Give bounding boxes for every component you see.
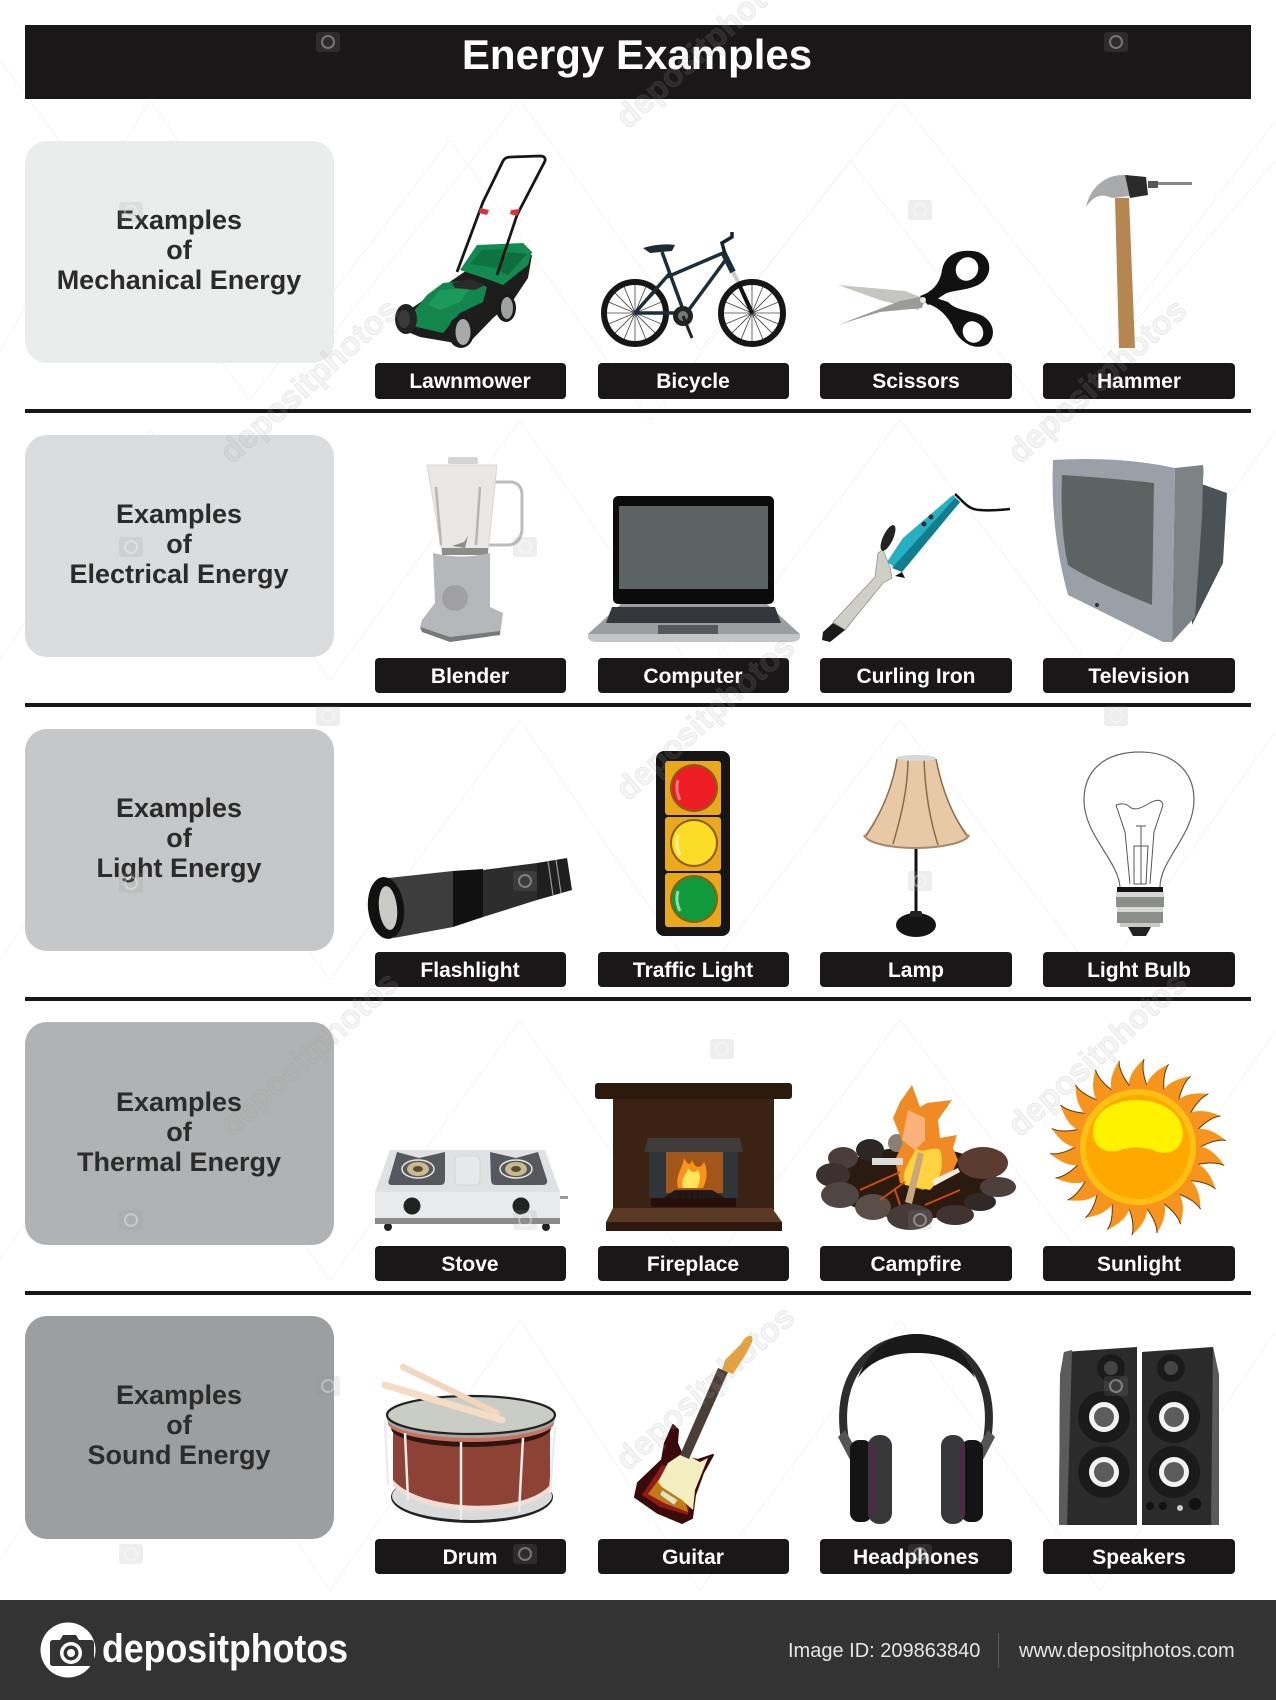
- panel: mechanical energy: [25, 141, 334, 363]
- panel: mechanical energy: Mechanical Energy: [57, 265, 301, 295]
- watermarks: depositphotos: [1000, 964, 1194, 1143]
- label: Fireplace: [598, 1246, 789, 1281]
- icon: sun: [1049, 1059, 1227, 1235]
- section: thermal energy: [25, 1022, 1235, 1281]
- label: Lawnmower: Lawnmower: [409, 370, 531, 393]
- icon: television: [1053, 459, 1227, 642]
- section: mechanical energy: [25, 141, 1235, 399]
- label: Traffic Light: [598, 952, 789, 987]
- watermarks: depositphotos: [212, 291, 406, 470]
- title bar: [25, 25, 1251, 99]
- label: Lamp: Lamp: [888, 959, 944, 982]
- label: Guitar: [598, 1539, 789, 1574]
- label: Computer: [598, 658, 789, 693]
- icon: blender: [420, 457, 522, 642]
- panel: mechanical energy: Examples: [116, 205, 242, 235]
- panel: light energy: Examples: [116, 793, 242, 823]
- footer bar: [0, 1600, 1276, 1700]
- icon: bicycle: [604, 232, 783, 344]
- section: light energy: [25, 729, 1235, 987]
- label: Headphones: [820, 1539, 1012, 1574]
- panel: light energy: [25, 729, 334, 951]
- icon: campfire: [816, 1085, 1016, 1230]
- label: Guitar: Guitar: [662, 1546, 724, 1569]
- section: sound energy: [25, 1316, 1235, 1574]
- label: Scissors: [820, 363, 1012, 399]
- icon: speakers: [1059, 1347, 1219, 1525]
- section: electrical energy: [25, 435, 1235, 693]
- label: Headphones: Headphones: [853, 1546, 979, 1569]
- label: Scissors: Scissors: [872, 370, 960, 393]
- icon: guitar: [635, 1336, 752, 1523]
- label: Campfire: Campfire: [870, 1253, 962, 1276]
- label: Blender: Blender: [431, 665, 509, 688]
- label: Light Bulb: [1043, 952, 1235, 987]
- label: Computer: Computer: [643, 665, 743, 688]
- label: Bicycle: Bicycle: [656, 370, 730, 393]
- image id: Image ID: 209863840: [788, 1640, 980, 1662]
- label: Stove: [375, 1246, 566, 1281]
- wordmark: depositphotos: [102, 1627, 348, 1671]
- label: Lamp: [820, 952, 1012, 987]
- panel: thermal energy: [25, 1022, 334, 1245]
- panel: light energy: Light Energy: [96, 853, 262, 883]
- icon: depositphotos logo: [40, 1622, 96, 1678]
- label: Light Bulb: Light Bulb: [1087, 959, 1191, 982]
- label: Sunlight: Sunlight: [1097, 1253, 1181, 1276]
- icon: curling iron: [822, 494, 1010, 642]
- label: Drum: [375, 1539, 566, 1574]
- panel: electrical energy: of: [166, 529, 193, 559]
- label: Fireplace: Fireplace: [647, 1253, 739, 1276]
- panel: electrical energy: [25, 435, 334, 657]
- icon: lawnmower: [395, 156, 545, 348]
- icon: traffic light: [656, 751, 730, 936]
- panel: sound energy: Sound Energy: [87, 1440, 271, 1470]
- watermarks: depositphotos: [608, 1298, 802, 1477]
- panel: sound energy: Examples: [116, 1380, 242, 1410]
- watermarks: depositphotos: [608, 628, 802, 807]
- panel: thermal energy: Thermal Energy: [77, 1147, 281, 1177]
- label: Blender: [375, 658, 566, 693]
- label: Drum: Drum: [443, 1546, 497, 1569]
- label: Hammer: [1043, 363, 1235, 399]
- label: Speakers: Speakers: [1092, 1546, 1186, 1569]
- panel: electrical energy: Electrical Energy: [69, 559, 289, 589]
- label: Campfire: [820, 1246, 1012, 1281]
- label: Television: Television: [1088, 665, 1190, 688]
- icon: computer: [588, 496, 800, 642]
- label: Flashlight: Flashlight: [420, 959, 520, 982]
- icon: headphones: [838, 1334, 995, 1524]
- label: Television: [1043, 658, 1235, 693]
- label: Speakers: [1043, 1539, 1235, 1574]
- watermarks: depositphotos: [1000, 291, 1194, 470]
- label: Flashlight: [375, 952, 566, 987]
- label: Lawnmower: [375, 363, 566, 399]
- label: Traffic Light: Traffic Light: [633, 959, 753, 982]
- title: Energy Examples: [462, 31, 812, 78]
- icon: drum: [385, 1367, 555, 1523]
- icon: lamp: [864, 755, 969, 937]
- icon: stove: [375, 1150, 568, 1231]
- panel: sound energy: [25, 1316, 334, 1539]
- watermarks: depositphotos: [212, 964, 406, 1143]
- panel: sound energy: of: [166, 1410, 193, 1440]
- label: Hammer: Hammer: [1097, 370, 1181, 393]
- icon: flashlight: [365, 858, 572, 941]
- website: www.depositphotos.com: [1018, 1640, 1235, 1662]
- panel: thermal energy: Examples: [116, 1087, 242, 1117]
- panel: thermal energy: of: [166, 1117, 193, 1147]
- label: Sunlight: [1043, 1246, 1235, 1281]
- panel: electrical energy: Examples: [116, 499, 242, 529]
- icon: fireplace: [595, 1083, 792, 1231]
- panel: light energy: of: [166, 823, 193, 853]
- icon: light bulb: [1084, 752, 1194, 936]
- label: Curling Iron: [820, 658, 1012, 693]
- icon: hammer: [1086, 175, 1192, 348]
- panel: mechanical energy: of: [166, 235, 193, 265]
- icon: scissors: [838, 251, 993, 347]
- label: Curling Iron: Curling Iron: [856, 665, 976, 688]
- label: Bicycle: [598, 363, 789, 399]
- label: Stove: Stove: [441, 1253, 499, 1276]
